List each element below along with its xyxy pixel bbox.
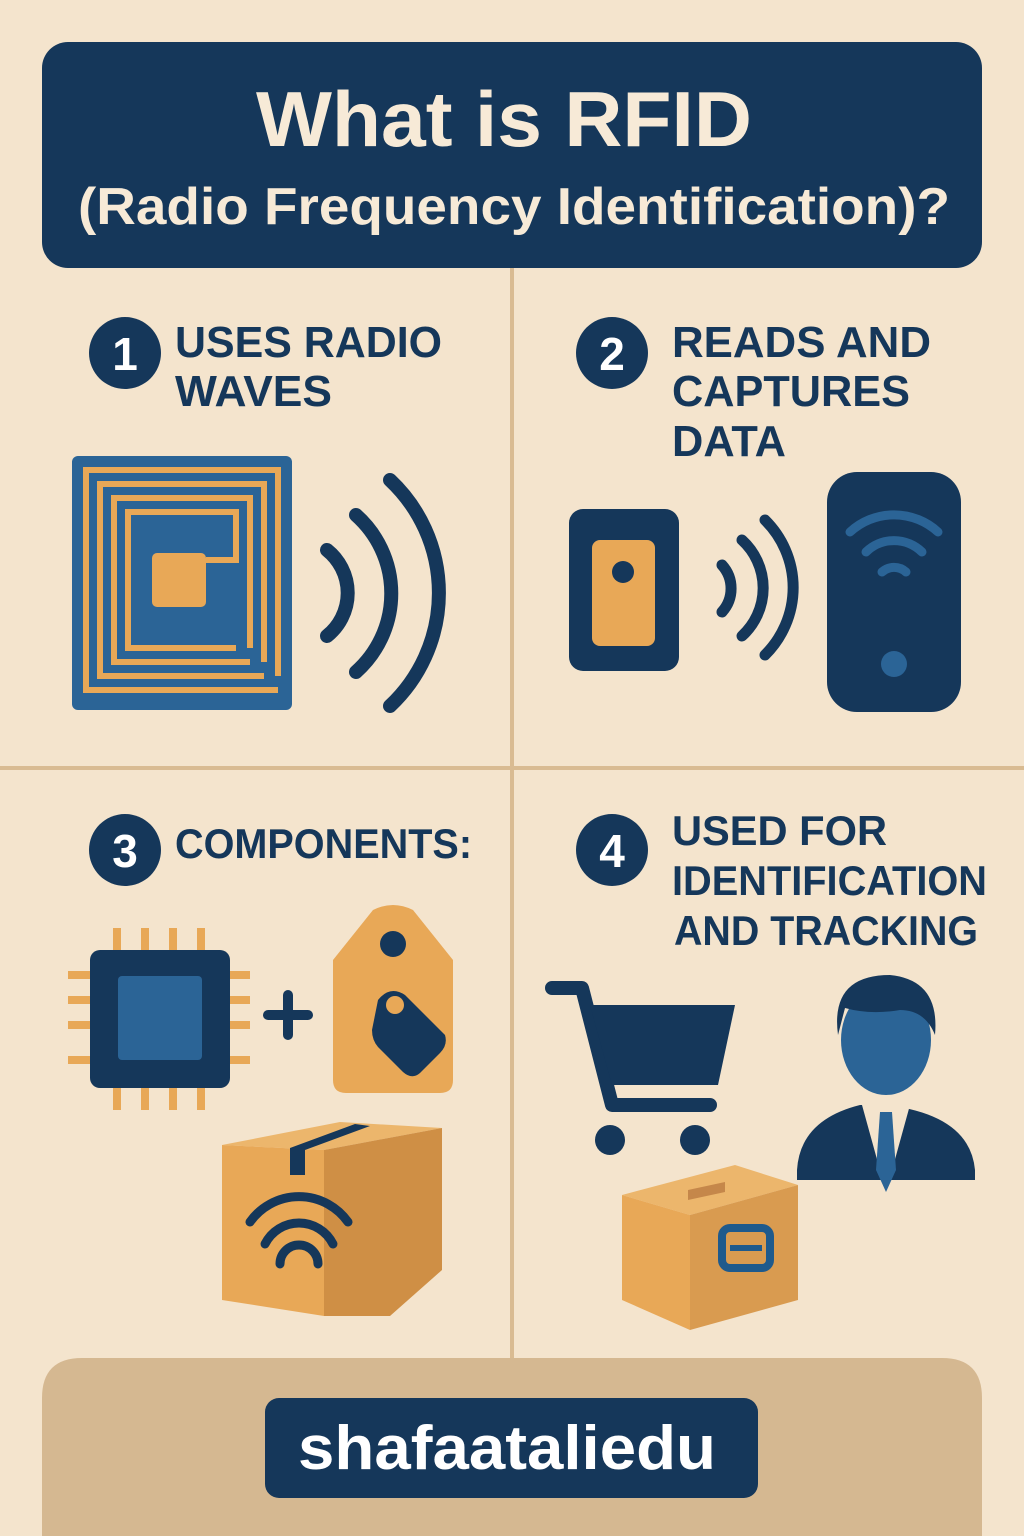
icon: signal waves (722, 520, 793, 655)
panel: identification and tracking (552, 807, 987, 1330)
icon: reader (827, 472, 961, 712)
icon: box with wifi (222, 1122, 442, 1316)
icon: rfid tag (72, 456, 292, 710)
heading 1: WAVES (175, 367, 332, 416)
heading 3: COMPONENTS: (175, 820, 472, 867)
heading 2: READS AND (672, 318, 931, 367)
heading 4: 4 (599, 825, 625, 877)
heading 1: USES RADIO (175, 318, 442, 367)
icon: plus (268, 995, 308, 1035)
footer: shafaataliedu (298, 1414, 716, 1483)
heading 2: CAPTURES (672, 367, 910, 416)
panel: reads and captures data (569, 317, 961, 712)
icon: tag (333, 905, 453, 1093)
panel: uses radio waves (72, 317, 442, 710)
footer (42, 1358, 982, 1536)
title: (Radio Frequency Identification)? (78, 178, 950, 236)
title (42, 42, 982, 268)
heading 2: 2 (599, 328, 625, 380)
icon: box (622, 1165, 798, 1330)
icon: card (569, 509, 679, 671)
heading 4 (576, 807, 987, 954)
icon: person (797, 975, 975, 1192)
heading 3 (89, 814, 472, 886)
heading 4: USED FOR (672, 807, 887, 854)
panel: components (68, 814, 472, 1316)
heading 3: 3 (112, 825, 138, 877)
icon: chip (68, 928, 250, 1110)
icon: radio waves (327, 480, 439, 706)
heading 1: 1 (112, 328, 138, 380)
heading 2: DATA (672, 417, 786, 466)
icon: shopping cart (552, 988, 735, 1155)
heading 4: IDENTIFICATION (672, 857, 987, 904)
heading 1 (89, 317, 442, 416)
title: What is RFID (256, 75, 752, 163)
heading 4: AND TRACKING (674, 907, 978, 954)
heading 2 (576, 317, 931, 466)
